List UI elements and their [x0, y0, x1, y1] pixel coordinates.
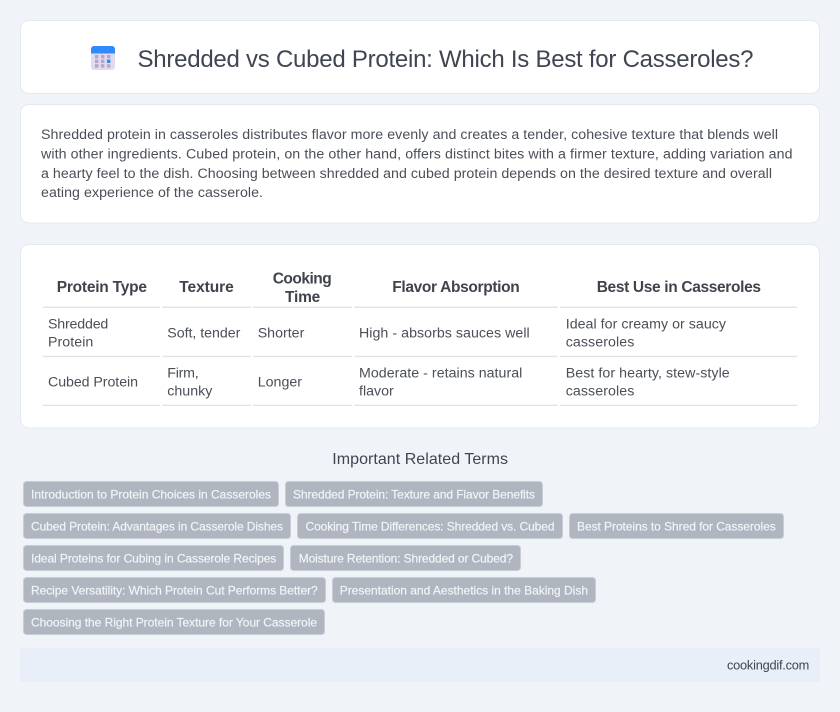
panel: header	[20, 20, 820, 94]
tag: Shredded Protein: Texture and Flavor Benefits	[293, 487, 535, 501]
table row: cubed protein: casseroles	[566, 384, 634, 400]
tag	[286, 482, 542, 506]
tag	[332, 578, 596, 602]
tag	[570, 514, 784, 538]
panel: summary paragraph	[20, 104, 820, 223]
table row: cubed protein: Cubed Protein	[48, 375, 138, 391]
panel: comparison table	[20, 244, 820, 428]
tag: Recipe Versatility: Which Protein Cut Performs Better?	[31, 583, 318, 597]
text block: summary	[40, 127, 792, 201]
tag	[298, 514, 562, 538]
table row: shredded protein: Soft, tender	[167, 326, 241, 342]
footer	[20, 648, 820, 682]
table row: cubed protein: Longer	[258, 375, 302, 391]
table header row: Time	[285, 289, 321, 306]
table row: cubed protein: Best for hearty, stew-style	[566, 366, 730, 382]
table row: cubed protein: Firm,	[167, 366, 199, 382]
tag	[24, 578, 326, 602]
related term tags	[24, 482, 784, 634]
table row: shredded protein	[43, 317, 797, 357]
icon: calendar	[91, 46, 115, 70]
tag	[24, 546, 284, 570]
table row: shredded protein: High - absorbs sauces well	[359, 326, 530, 342]
tag: Best Proteins to Shred for Casseroles	[577, 519, 776, 533]
tag: Moisture Retention: Shredded or Cubed?	[299, 551, 513, 565]
table header row: Best Use in Casseroles	[597, 279, 761, 296]
footer source text: cookingdif.com	[727, 657, 809, 672]
title: Shredded vs Cubed Protein: Which Is Best for Casseroles?	[138, 46, 754, 73]
tag: Presentation and Aesthetics in the Baking Dish	[340, 583, 588, 597]
tag: Introduction to Protein Choices in Casseroles	[31, 487, 271, 501]
table row: cubed protein	[43, 366, 797, 406]
tag: Ideal Proteins for Cubing in Casserole Recipes	[31, 551, 276, 565]
tag	[24, 482, 278, 506]
text block: summary: a hearty feel to the dish. Choosing between shredded and cubed protein depends on the desired texture and overall	[41, 166, 772, 182]
table row: cubed protein: Moderate - retains natural	[359, 366, 522, 382]
tag	[24, 514, 290, 538]
table header row: Flavor Absorption	[392, 279, 520, 296]
table row: cubed protein: chunky	[167, 384, 213, 400]
text block: summary: with other ingredients. Cubed protein, on the other hand, offers distinct bites with a firmer texture, adding variation and	[40, 146, 792, 162]
tag: Choosing the Right Protein Texture for Your Casserole	[31, 615, 317, 629]
tag: Cooking Time Differences: Shredded vs. Cubed	[306, 519, 554, 533]
table row: shredded protein: Protein	[48, 335, 93, 351]
table row: shredded protein: Shredded	[48, 317, 108, 333]
tag: Cubed Protein: Advantages in Casserole Dishes	[31, 519, 283, 533]
table row: shredded protein: Shorter	[258, 326, 305, 342]
table row: shredded protein: casseroles	[566, 335, 634, 351]
text block: summary: Shredded protein in casseroles distributes flavor more evenly and creates a tender, cohesive texture that blends well	[41, 127, 778, 143]
table header row	[43, 270, 797, 308]
table row: cubed protein: flavor	[359, 384, 394, 400]
tag	[24, 610, 324, 634]
table header row: Texture	[179, 279, 234, 296]
table header row: Cooking	[273, 270, 332, 287]
tag	[290, 546, 520, 570]
heading: related terms: Important Related Terms	[332, 451, 508, 468]
table header row: Protein Type	[57, 279, 147, 296]
table row: shredded protein: Ideal for creamy or saucy	[566, 317, 727, 333]
text block: summary: eating experience of the casserole.	[41, 185, 263, 201]
